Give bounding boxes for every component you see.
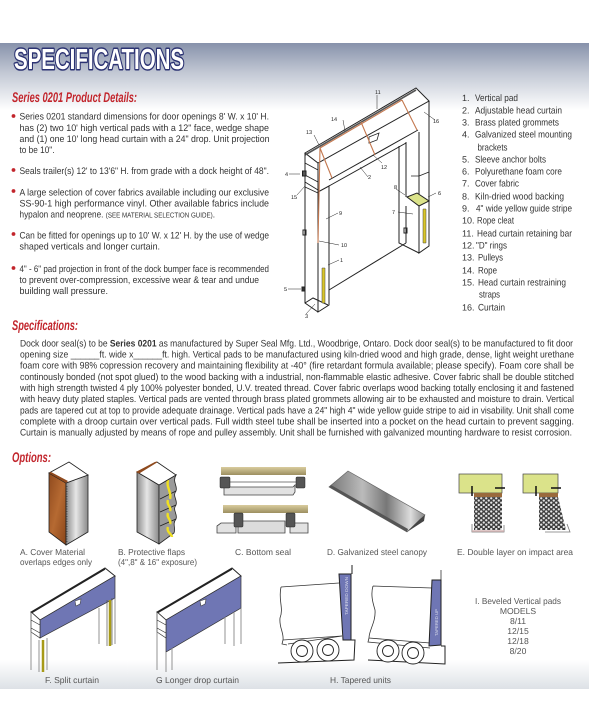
diagram: part number callouts: 9 <box>339 211 342 217</box>
option D: galvanized steel canopy: D. Galvanized steel canopy <box>327 547 428 557</box>
option F: split curtain <box>31 568 115 685</box>
parts list: 7. <box>462 178 470 188</box>
parts list: Brass plated grommets <box>475 118 559 128</box>
diagram: part number callouts: 14 <box>331 117 337 123</box>
footer gradient band <box>0 660 589 689</box>
diagram: part number callouts: 1 <box>340 258 343 264</box>
option A: cover material overlaps edges: overlaps edges only <box>20 557 93 567</box>
parts list: 2. <box>462 106 470 116</box>
product details bullet list: and (1) one 10' long head curtain with a 24" drop. Unit projection <box>20 134 270 145</box>
truck and pad: right <box>368 570 445 664</box>
truck and pad: left <box>278 565 355 663</box>
parts list: 12. <box>462 240 475 250</box>
parts list: 13. <box>462 252 475 262</box>
option C: bottom seal: C. Bottom seal <box>235 547 291 557</box>
diagram: part number callouts: 8 <box>394 185 397 191</box>
diagram: yellow guide stripes <box>322 209 426 303</box>
option I: beveled vertical pads models: MODELS <box>500 606 536 616</box>
option A: cover material overlaps edges: A. Cover Material <box>20 547 85 557</box>
parts list: 1. <box>462 93 470 103</box>
option D: galvanized steel canopy <box>327 471 428 557</box>
parts list: 5. <box>462 154 470 164</box>
diagram: part number callouts: 7 <box>392 210 395 216</box>
diagram: part number callouts: 5 <box>284 287 287 293</box>
parts list: 15. <box>462 278 475 288</box>
option C: bottom seal <box>217 467 308 557</box>
parts list: 6. <box>462 166 470 176</box>
title: SPECIFICATIONS <box>14 44 184 76</box>
parts list: Vertical pad <box>475 93 518 104</box>
truck and pad: right: TAPERED UP <box>434 609 439 636</box>
heading: specifications: Specifications: <box>12 317 78 333</box>
product details bullet list: Seals trailer(s) 12' to 13'6" H. from grade with a dock height of 48". <box>20 166 269 177</box>
product details bullet list: to prevent over-compression, excessive wear & tear and undue <box>20 275 259 286</box>
diagram: part number callouts: 4 <box>285 172 288 178</box>
parts list: Pulleys <box>478 252 503 264</box>
option I: beveled vertical pads models: I. Beveled Vertical pads <box>475 596 561 606</box>
parts list: Rope <box>478 266 497 276</box>
diagram: part number callouts: 11 <box>375 90 381 96</box>
parts list: 3. <box>462 118 470 128</box>
parts list: Head curtain restraining <box>478 278 566 288</box>
heading: options: Options: <box>12 449 51 465</box>
parts diagram: dock seal assembly <box>284 88 441 320</box>
header gradient band <box>0 43 589 110</box>
heading: product details: Series 0201 Product Details: <box>12 89 137 105</box>
product details bullet list <box>12 112 269 297</box>
parts list: Galvanized steel mounting <box>475 130 572 140</box>
option G: longer drop curtain <box>156 568 241 685</box>
option I: beveled vertical pads models <box>475 596 561 656</box>
parts list: 4" wide yellow guide stripe <box>476 204 572 214</box>
parts list: straps <box>479 290 500 300</box>
option B: protective flaps: (4",8" & 16" exposure) <box>118 557 197 567</box>
parts list <box>462 93 572 314</box>
specifications paragraph: complete with a droop curtain over vertical pads. Full width steel tube shall be inserted into a pocket on the head curtain to prevent sagging. <box>20 416 574 428</box>
diagram: part number callouts: 2 <box>368 175 371 181</box>
option H: tapered units: H. Tapered units <box>330 675 391 685</box>
option E: double layer on impact area <box>457 474 573 557</box>
parts list: Polyurethane foam core <box>475 166 562 178</box>
parts list: Adjustable head curtain <box>475 106 562 116</box>
option H: tapered units <box>278 565 445 685</box>
parts list: Cover fabric <box>475 178 519 190</box>
product details bullet list: building wall pressure. <box>20 286 108 297</box>
parts list: 14. <box>462 266 475 276</box>
option I: beveled vertical pads models: 8/11 <box>510 616 526 626</box>
product details bullet list: 4" - 6" pad projection in front of the dock bumper face is recommended <box>20 264 269 275</box>
parts list: 4. <box>462 130 470 140</box>
diagram: white frame faces <box>305 88 429 312</box>
diagram: part number callouts: 13 <box>306 130 312 136</box>
diagram: part number callouts: 12 <box>381 165 387 171</box>
parts list: 16. <box>462 302 475 312</box>
product details bullet list: A large selection of cover fabrics available including our exclusive <box>20 188 269 198</box>
product details bullet list: shaped verticals and longer curtain. <box>20 242 160 252</box>
parts list: 11. <box>462 228 474 238</box>
specifications paragraph <box>19 338 574 438</box>
product details bullet list: Can be fitted for openings up to 10' W. x 12' H. by the use of wedge <box>20 230 269 242</box>
option B: protective flaps <box>118 462 197 567</box>
option E: double layer on impact area: E. Double layer on impact area <box>457 547 573 557</box>
diagram: part number callouts: 10 <box>341 243 347 249</box>
product details bullet list: SS-90-1 high performance vinyl. Other available fabrics include <box>20 198 269 210</box>
option I: beveled vertical pads models: 12/15 <box>507 626 529 636</box>
diagram: part number callouts: 3 <box>305 314 308 320</box>
option G: longer drop curtain: G Longer drop curtain <box>156 675 239 685</box>
truck and pad: left: TAPERED DOWN <box>344 577 349 615</box>
parts list: Head curtain retaining bar <box>477 228 572 240</box>
parts list: Kiln-dried wood backing <box>475 192 564 202</box>
diagram: part number callouts <box>284 90 441 320</box>
parts list: Rope cleat <box>477 216 514 226</box>
parts list: 8. <box>462 192 470 202</box>
parts list: 9. <box>462 204 470 214</box>
parts list: brackets <box>478 142 508 154</box>
product details bullet list: Series 0201 standard dimensions for door openings 8' W. x 10' H. <box>20 112 269 122</box>
parts list: 10. <box>462 216 475 226</box>
option F: split curtain: F. Split curtain <box>45 675 99 685</box>
product details bullet list: hypalon and neoprene. (SEE MATERIAL SELECTION GUIDE). <box>20 210 215 220</box>
diagram: foam core <box>407 193 429 206</box>
diagram: part number callouts: 6 <box>438 191 441 197</box>
option B: protective flaps: B. Protective flaps <box>118 547 185 557</box>
option A: cover material overlaps edges <box>20 462 93 567</box>
diagram: part number callouts: 16 <box>433 119 439 125</box>
option I: beveled vertical pads models: 12/18 <box>507 636 529 646</box>
parts list: Curtain <box>478 302 505 314</box>
parts list: Sleeve anchor bolts <box>475 154 546 166</box>
option I: beveled vertical pads models: 8/20 <box>510 646 527 656</box>
product details bullet list: to be 10". <box>20 145 54 156</box>
parts list: "D" rings <box>476 240 507 252</box>
diagram: rope <box>318 100 417 243</box>
diagram: part number callouts: 15 <box>291 195 297 201</box>
product details bullet list: has (2) two 10' high vertical pads with a 12" face, wedge shape <box>20 123 269 134</box>
